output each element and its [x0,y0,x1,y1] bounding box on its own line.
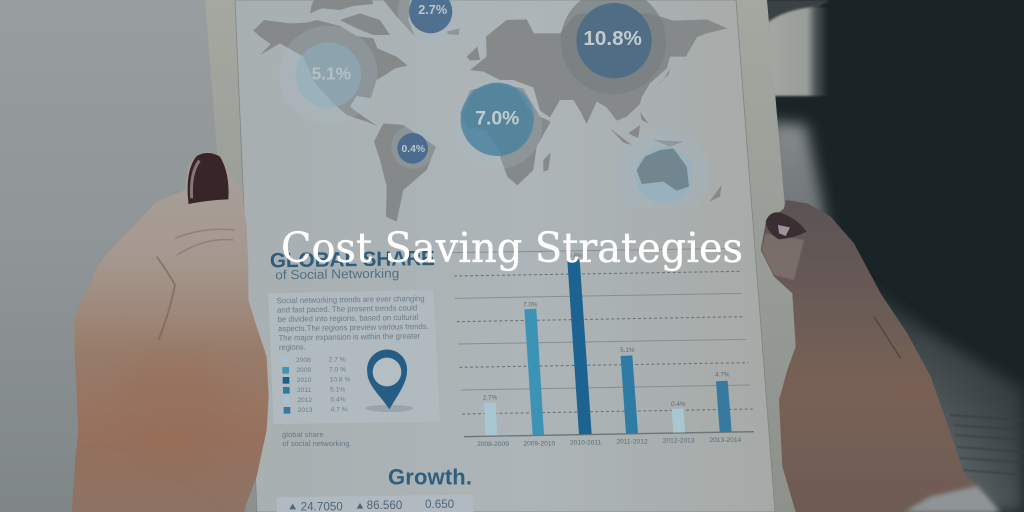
year labels: 2009-2010 [523,440,556,447]
description text: regions. [279,343,306,352]
right dark background [760,0,1024,512]
left hand holding tablet [72,152,269,512]
year labels: 2012-2013 [663,438,695,445]
year labels: 2008-2009 [477,441,509,448]
legend: 2.7 % [329,356,346,363]
description text: aspects.The regions preview various trends. [278,322,429,333]
year labels: 2011-2012 [616,439,648,446]
legend: 2010 [297,377,312,384]
legend: 2011 [297,387,312,394]
bubble: 0.4%: 0.4% [402,144,425,155]
description text [277,294,429,352]
bubble: 10.8%: 10.8% [583,27,642,50]
bar values: 4.7% [715,371,730,378]
bar values: 0.4% [671,401,686,408]
open book lower right [850,270,1024,512]
description text: The major expansion is within the greater [278,331,421,343]
legend: 0.4% [330,396,346,403]
bar values: 10.8% [565,252,583,259]
bars [484,259,732,435]
tablet body [205,0,800,512]
bubble: 5.1%: 5.1% [312,63,351,83]
legend: 10.8 % [330,376,350,383]
right hand holding tablet [761,200,1001,512]
year labels: 2013-2014 [709,437,742,444]
bubble: 2.7% [398,0,466,46]
heading: global share: GLOBAL SHARE [270,247,435,272]
bubble: 0.4% [391,125,435,169]
tablet bezel [205,0,800,512]
year labels [477,437,742,448]
year labels: 2010-2011 [570,440,602,447]
bar values: 7.0% [523,301,538,308]
description text: and fast paced. The present trends could [277,303,417,315]
legend: 2008 [296,357,311,364]
thumb creases [80,229,235,512]
bubble: Australia [630,136,692,204]
title: Cost Saving Strategies [281,224,743,272]
caption: of social networking. [282,439,352,448]
sleeve at lower right [904,486,1001,512]
description text: Social networking trends are ever changing [277,294,425,305]
lower infographic on tablet screen [268,247,754,512]
heading: growth: Growth. [388,465,472,490]
bubble: 10.8% [561,0,666,94]
growth stats strip [277,495,473,512]
bubble: 5.1% [279,26,378,124]
growth stats strip: 86.560 [367,499,403,512]
legend: 2012 [297,397,312,404]
fingertip highlight [761,233,804,280]
heading: global share: of Social Networking [275,266,399,282]
left background wall [0,0,300,512]
bar chart [452,248,754,448]
legend: 2013 [298,407,313,414]
caption: global share [282,430,324,439]
legend [282,356,350,414]
description panel [268,290,440,424]
mug behind tablet [760,0,835,285]
caption [282,430,352,448]
legend: 7.0 % [329,366,346,373]
finger crease [874,317,901,358]
continents [253,0,727,222]
icon: dark thumbnail [188,153,229,204]
bar values: 2.7% [483,395,498,402]
growth stats strip: 0.650 [425,498,455,511]
legend: 2009 [296,367,311,374]
palm shading [117,350,230,463]
bubble: 7.0% [454,81,542,169]
tablet screen [235,0,775,512]
description text: be divided into regions, based on cultural [278,313,419,324]
legend: 4.7 % [331,406,348,413]
legend: 5.1% [330,386,345,393]
bubble: 7.0%: 7.0% [475,109,519,130]
icon: location pin [365,350,413,412]
bar values [483,252,730,408]
icon: dark fingernail [766,212,807,239]
bubble: 2.7%: 2.7% [418,3,447,17]
bar values: 5.1% [620,347,635,354]
world map on tablet screen [253,0,727,222]
